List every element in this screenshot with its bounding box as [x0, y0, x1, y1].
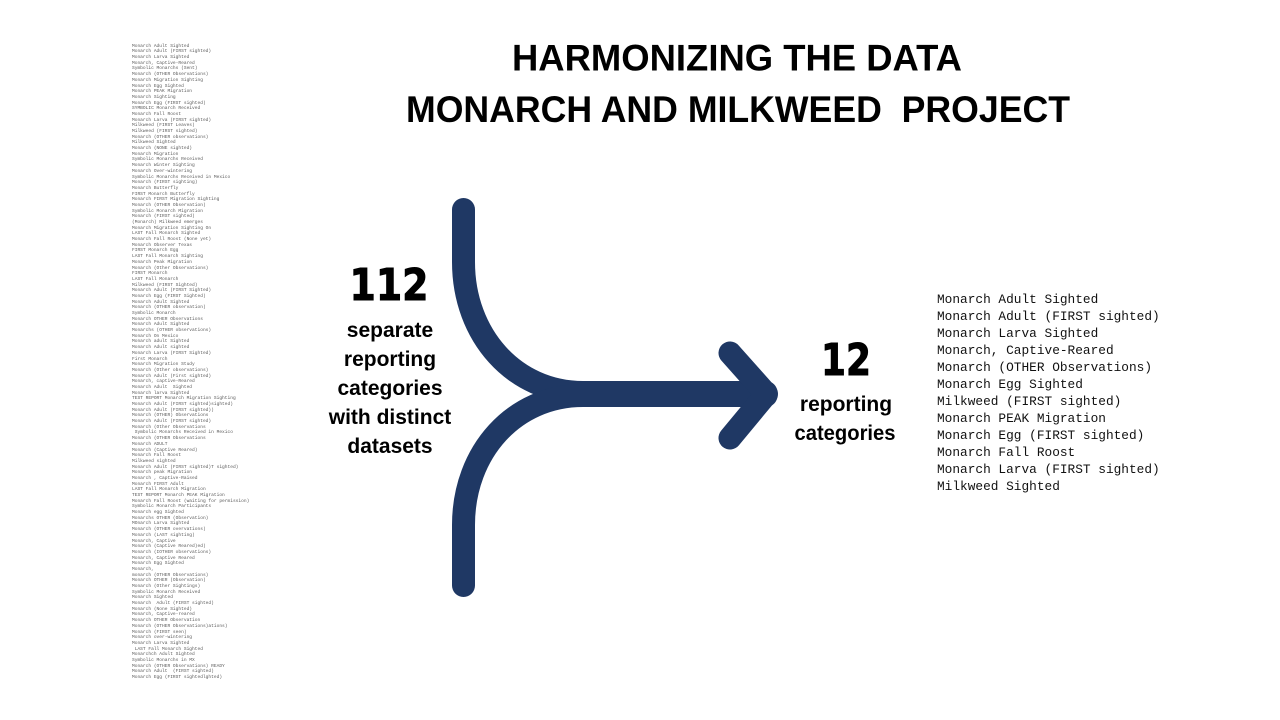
count: 112 separate categories — [328, 260, 451, 458]
title: HARMONIZING THE DATA — [512, 38, 962, 78]
count: 12 reporting categories: categories — [794, 422, 896, 445]
list: 112 raw reporting categories: Monarch Adult Sighted Monarch Adult (FIRST sighted) Monarch Larva Sighted Monarch, Captive-Reared Symbolic Monarchs (Sent) Monarch (OTHER Observations) Monarch Migration Sighting Monarch Egg Sighted Monarch PEAK Migration Monarch Sighting Monarch Egg (FIRST sighted) SYMBOLIC Monarch Received Monarch Fall Roost Monarch Larva (FIRST sighted) Milkweed (FIRST Leaves) Milkweed (FIRST sighted) Monarch (OTHER observations) Milkweed Sighted Monarch (NONE sighted) Monarch Migration Symbolic Monarchs Received Monarch Winter Sighting Monarch Over-wintering Symbolic Monarchs Received in Mexico Monarch (FIRST sighting) Monarch Butterfly FIRST Monarch Butterfly Monarch FIRST Migration Sighting Monarch (OTHER Observation) Symbolic Monarch Migration Monarch (FIRST sighted) (Monarch) Milkweed emerges Monarch Migration Sighting On LAST Fall Monarch Sighted Monarch Fall Roost (None yet) Monarch Observer Texas FIRST Monarch Egg LAST Fall Monarch Sighting Monarch Peak Migration Monarch (Other Observations) FIRST Monarch LAST Fall Monarch Milkweed (FIRST Sighted) Monarch Adult (FIRST Sighted) Monarch Egg (FIRST Sighted) Monarch Adult Sighted Monarch (OTHER observation) Symbolic Monarch Monarch OTHER Observations Monarch Adult Sighted Monarchs (OTHER observations) Monarch On Mexico Monarch adult Sighted Monarch Adult sighted Monarch Larva (FIRST Sighted) First Monarch Monarch Migration Study Monarch (Other observations) Monarch Adult (First sighted) Monarch, captive-Reared Monarch Adult Sighted Monarch larva Sighted TEST REPORT Monarch Migration Sighting Monarch Adult (FIRST sighted)sighted) Monarch Adult (FIRST sighted)) Monarch (OTHER) Observations Monarch Adult (FIRST sighted) Monarch (Other Observations Symbolic Monarchs Received in Mexico Monarch (OTHER Observations Monarch ADULT Monarch (Captive Reared) Monarch Fall Roost Milkweed sighted Monarch Adult (FIRST sighted)T sighted) Monarch peak Migration Monarch , Captive-Raised Monarch FIRST Adult LAST Fall Monarch Migration TEST REPORT Monarch PEAK Migration Monarch Fall Roost (waiting for permission) Symbolic Monarch Participants Monarch egg Sighted Monarchs OTHER (Observation) MOnarch Larva Sighted Monarch (OTHER overvations) Monarch (LAST sighting) Monarch, Captive Monarch (Captive Reared)ed) Monarch (IOTHER observations) Monarch, Captive Reared Monarch Egg Sighted Monarch, monarch (OTHER Observations) Monarch OTHER (Observation) Monarch (Other Sightings) Symbolic Monarch Received Monarch Sighted Monarch Adult (FIRST sighted) Monarch (None Sighted) Monarch, Captive-reared Monarch OTHER Observation Monarch (OTHER Observations)ations) Monarch (FIRST seen) Monarch over-wintering Monarch Larva Sighted LAST Fall Monarch Sighted Monarchch Adult Sighted Symbolic Monarchs in MX Monarch (OTHER Observations) READY Monarch Adult (FIRST sighted) Monarch Egg (FIRST sightedlghted) — [132, 44, 249, 680]
count: 112 separate categories: separate — [347, 319, 433, 342]
count: 112 separate categories: with distinct — [328, 406, 451, 429]
count: 112 separate categories: categories — [337, 377, 443, 400]
count: 12 reporting categories: 12 — [821, 335, 871, 386]
count: 112 separate categories: 112 — [350, 260, 428, 311]
title: MONARCH AND MILKWEED PROJECT — [406, 89, 1070, 130]
count: 112 separate categories: datasets — [347, 435, 433, 458]
count: 12 reporting categories: reporting — [800, 393, 892, 416]
count: 112 separate categories: reporting — [344, 348, 436, 371]
list: 12 harmonized categories: Monarch Adult Sighted Monarch Adult (FIRST sighted) Monarch Larva Sighted Monarch, Captive-Reared Monarch (OTHER Observations) Monarch Egg Sighted Milkweed (FIRST sighted) Monarch PEAK Migration Monarch Egg (FIRST sighted) Monarch Fall Roost Monarch Larva (FIRST sighted) Milkweed Sighted — [937, 292, 1160, 494]
arrow: merging categories into one — [464, 210, 766, 586]
count: 12 reporting categories — [794, 335, 896, 445]
title — [406, 38, 1070, 130]
